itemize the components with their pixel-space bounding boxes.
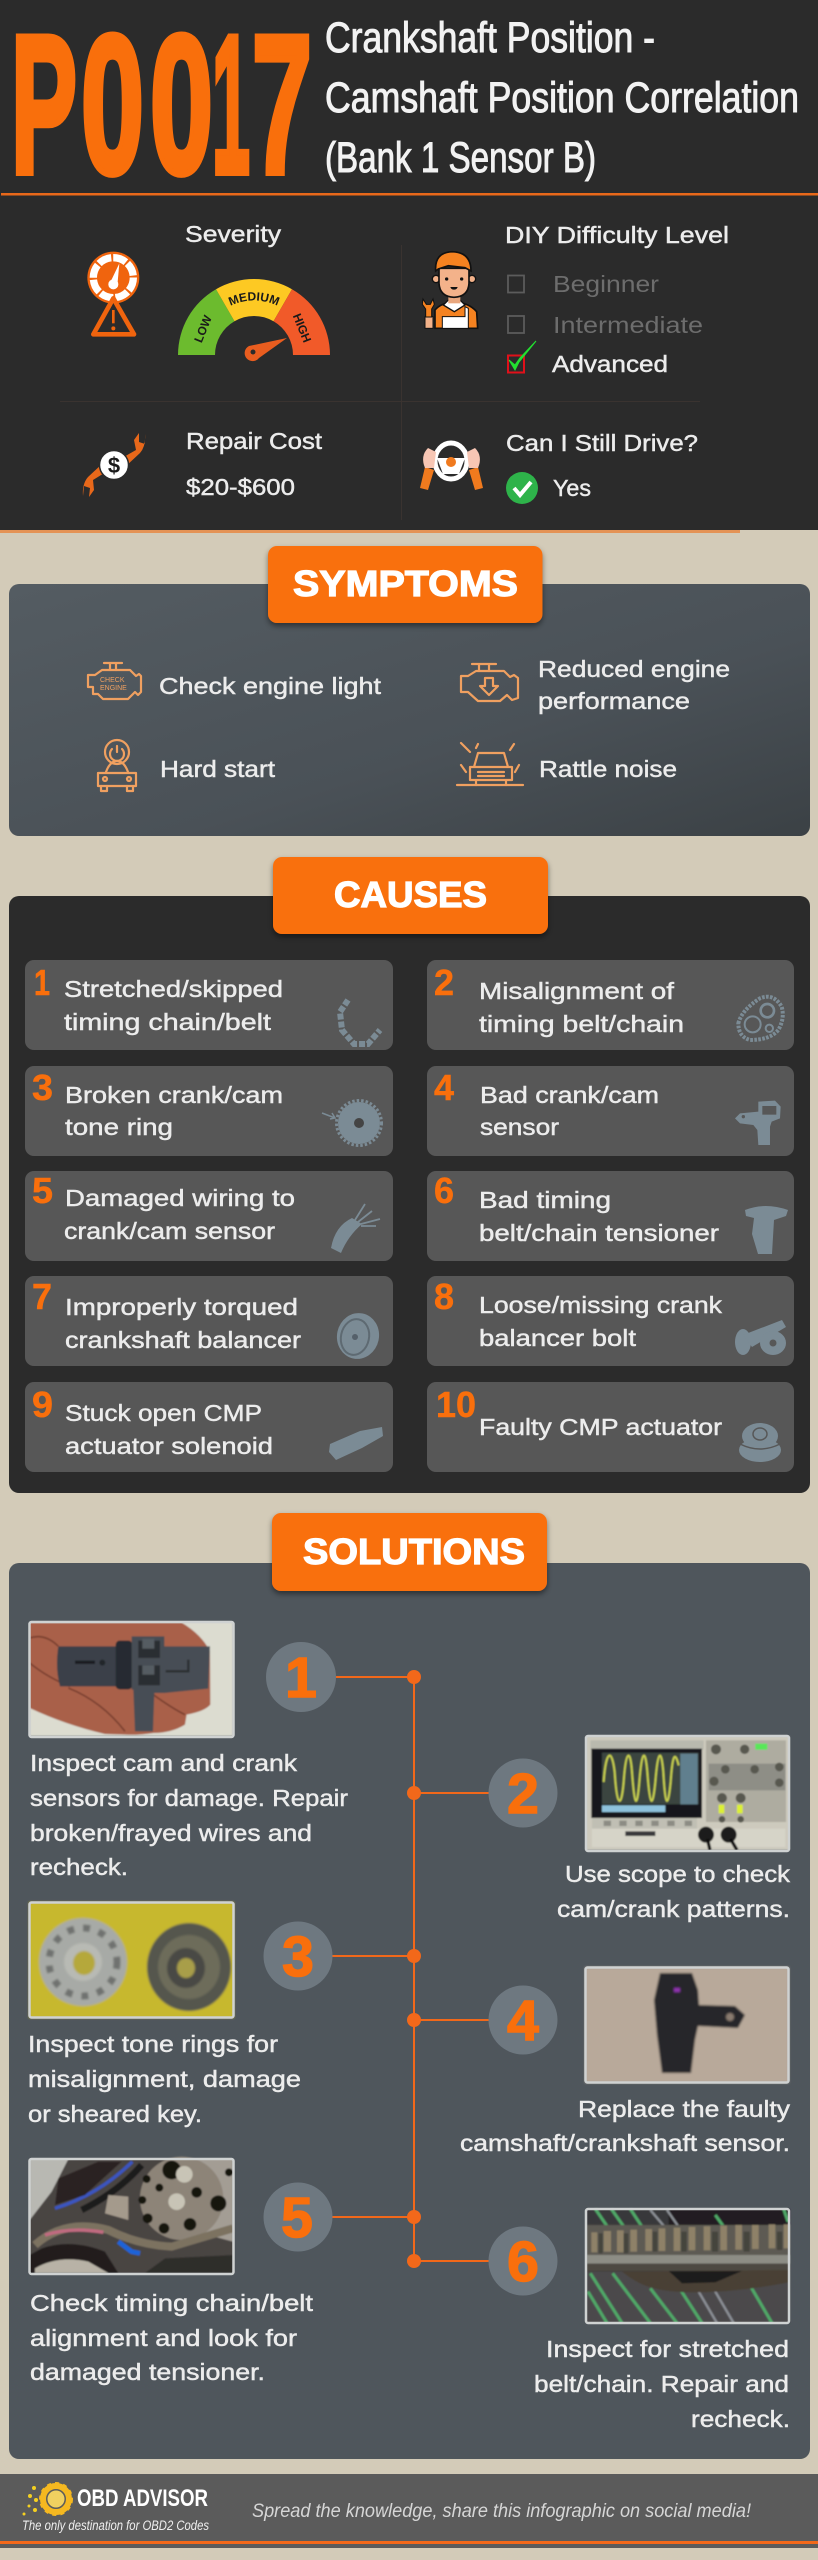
text: solution 1 bbox=[30, 1750, 348, 1880]
icon: check engine bbox=[88, 663, 141, 699]
step number 2 bbox=[488, 1758, 558, 1828]
control: difficulty options: Beginner bbox=[553, 271, 659, 297]
icon: reduced engine performance bbox=[461, 664, 518, 701]
card: cause 9: 9 bbox=[32, 1384, 53, 1425]
heading: symptoms bbox=[268, 546, 542, 623]
step number 2: 2 bbox=[507, 1762, 539, 1826]
text: repair cost: $20-$600 bbox=[186, 474, 295, 500]
card: cause 1: Stretched/skipped bbox=[64, 976, 283, 1002]
card: cause 7 bbox=[25, 1276, 393, 1366]
text: solution 3 bbox=[28, 2031, 301, 2127]
card: cause 6: Bad timing bbox=[479, 1187, 611, 1213]
card: cause 4: sensor bbox=[480, 1114, 559, 1140]
title: code description: (Bank 1 Sensor B) bbox=[325, 134, 596, 182]
card: cause 2 bbox=[427, 960, 794, 1050]
panel: header bbox=[0, 0, 818, 533]
card: cause 8: 8 bbox=[434, 1276, 454, 1317]
step number 3: 3 bbox=[282, 1925, 314, 1989]
step number 3 bbox=[264, 1922, 332, 1990]
card: cause 4 bbox=[427, 1066, 794, 1156]
text: solution 6: belt/chain. Repair and bbox=[534, 2371, 789, 2397]
icon: repair cost wrench and dollar bbox=[83, 433, 145, 497]
card: cause 5: crank/cam sensor bbox=[64, 1218, 275, 1244]
heading: causes: CAUSES bbox=[334, 874, 487, 915]
text: solution 1: Inspect cam and crank bbox=[30, 1750, 298, 1776]
step number 6 bbox=[488, 2226, 558, 2296]
heading: solutions: SOLUTIONS bbox=[303, 1531, 525, 1572]
text: solution 2 bbox=[557, 1861, 791, 1922]
text: hard start: Hard start bbox=[160, 756, 276, 782]
card: cause 9: Stuck open CMP bbox=[65, 1400, 262, 1426]
text: OBD Advisor logo: OBD ADVISOR bbox=[77, 2485, 208, 2512]
heading: solutions bbox=[272, 1513, 547, 1591]
text: solution 6 bbox=[534, 2336, 790, 2432]
text: solution 3: Inspect tone rings for bbox=[28, 2031, 278, 2057]
title: code description: Crankshaft Position - bbox=[325, 14, 655, 62]
card: cause 4: Bad crank/cam bbox=[480, 1082, 659, 1108]
step number 4 bbox=[488, 1986, 558, 2054]
card: cause 7: Improperly torqued bbox=[65, 1294, 298, 1320]
photo: oscilloscope bbox=[586, 1736, 789, 1851]
card: cause 9 bbox=[25, 1382, 393, 1472]
text: solution 4: camshaft/crankshaft sensor. bbox=[460, 2130, 790, 2156]
chart: severity gauge: MEDIUM bbox=[228, 292, 280, 306]
text: solution 1: sensors for damage. Repair bbox=[30, 1785, 348, 1811]
step number 4: 4 bbox=[507, 1989, 539, 2053]
text: solution 6: Inspect for stretched bbox=[546, 2336, 789, 2362]
card: cause 10: 10 bbox=[436, 1384, 476, 1425]
icon: repair cost wrench and dollar: $ bbox=[108, 453, 120, 478]
card: cause 8: Loose/missing crank bbox=[479, 1292, 723, 1318]
photo: sensor in hand bbox=[30, 1622, 234, 1737]
text: repair cost: Repair Cost bbox=[186, 428, 323, 454]
icon: severity speedometer and warning bbox=[87, 252, 139, 334]
text: reduced engine performance: Reduced engine bbox=[538, 656, 730, 682]
card: cause 3 bbox=[25, 1066, 393, 1156]
card: cause 10: Faulty CMP actuator bbox=[479, 1414, 722, 1440]
card: cause 1: 1 bbox=[34, 962, 50, 1003]
title: code P0017: 0 bbox=[150, 0, 213, 214]
heading: causes bbox=[273, 857, 548, 934]
text: solution 6: recheck. bbox=[691, 2406, 790, 2432]
text: check engine light: Check engine light bbox=[159, 673, 382, 699]
chart: severity gauge: HIGH bbox=[290, 311, 314, 345]
text: solution 4: Replace the faulty bbox=[578, 2096, 791, 2122]
photo: timing chain bbox=[30, 2157, 234, 2274]
photo: tone rings bbox=[29, 1902, 234, 2018]
chart: severity gauge: LOW bbox=[191, 313, 215, 345]
step number 1: 1 bbox=[285, 1646, 317, 1710]
card: cause 7: crankshaft balancer bbox=[65, 1327, 301, 1353]
text: OBD Advisor logo bbox=[22, 2485, 209, 2533]
text: solution 2: Use scope to check bbox=[565, 1861, 791, 1887]
text: can I still drive bbox=[506, 430, 698, 504]
panel: footer bbox=[0, 2474, 818, 2548]
text: solution 2: cam/crank patterns. bbox=[557, 1896, 790, 1922]
heading: symptoms: SYMPTOMS bbox=[293, 563, 518, 604]
card: cause 2: timing belt/chain bbox=[479, 1011, 684, 1037]
timeline connector bbox=[332, 1670, 489, 2268]
text: solution 3: or sheared key. bbox=[28, 2101, 202, 2127]
text: OBD Advisor logo: The only destination for OBD2 Codes bbox=[22, 2518, 209, 2533]
text: share message: Spread the knowledge, share this infographic on social media! bbox=[252, 2501, 752, 2522]
title: code P0017 bbox=[11, 0, 312, 214]
card: cause 8: balancer bolt bbox=[479, 1325, 637, 1351]
card: cause 3: Broken crank/cam bbox=[65, 1082, 283, 1108]
text: solution 5: Check timing chain/belt bbox=[30, 2290, 314, 2316]
card: cause 2: Misalignment of bbox=[479, 978, 675, 1004]
card: cause 3: tone ring bbox=[65, 1114, 173, 1140]
text: solution 5: damaged tensioner. bbox=[30, 2359, 265, 2385]
icon: rattle noise bbox=[457, 743, 523, 785]
title: code description bbox=[325, 14, 799, 182]
chart: severity gauge bbox=[178, 279, 330, 362]
text: severity heading: Severity bbox=[185, 221, 282, 247]
control: difficulty options: Intermediate bbox=[553, 312, 703, 338]
card: cause 10 bbox=[427, 1382, 794, 1472]
card: cause 6: belt/chain tensioner bbox=[479, 1220, 719, 1246]
icon: check engine: ENGINE bbox=[100, 685, 127, 692]
text: repair cost bbox=[186, 428, 323, 500]
control: difficulty options: Advanced bbox=[552, 351, 668, 377]
step number 6: 6 bbox=[507, 2230, 539, 2294]
card: cause 1: timing chain/belt bbox=[64, 1009, 272, 1035]
card: cause 7: 7 bbox=[32, 1276, 52, 1317]
icon: mechanic bbox=[422, 252, 478, 328]
photo: replacement sensor bbox=[585, 1967, 789, 2083]
text: solution 4 bbox=[460, 2096, 791, 2156]
title: code P0017: P bbox=[11, 0, 77, 214]
text: difficulty heading: DIY Difficulty Level bbox=[505, 222, 729, 248]
card: cause 6: 6 bbox=[434, 1170, 454, 1211]
text: reduced engine performance bbox=[538, 656, 730, 714]
card: cause 8 bbox=[427, 1276, 794, 1366]
card: cause 4: 4 bbox=[434, 1067, 454, 1108]
title: code P0017: 0 bbox=[81, 0, 144, 214]
card: cause 5: 5 bbox=[32, 1170, 53, 1211]
text: can I still drive: Can I Still Drive? bbox=[506, 430, 698, 456]
text: solution 1: recheck. bbox=[30, 1854, 128, 1880]
text: solution 3: misalignment, damage bbox=[28, 2066, 301, 2092]
step number 1 bbox=[266, 1642, 336, 1712]
icon: OBD Advisor gear logo bbox=[22, 2484, 72, 2516]
card: cause 6 bbox=[427, 1170, 794, 1261]
panel: solutions bbox=[9, 1513, 810, 2459]
card: cause 1 bbox=[25, 960, 393, 1050]
text: solution 1: broken/frayed wires and bbox=[30, 1820, 312, 1846]
card: cause 2: 2 bbox=[434, 962, 454, 1003]
card: cause 5: Damaged wiring to bbox=[65, 1185, 295, 1211]
control: difficulty options bbox=[508, 271, 703, 377]
text: reduced engine performance: performance bbox=[538, 688, 690, 714]
title: code P0017: 7 bbox=[252, 0, 312, 214]
icon: check engine: CHECK bbox=[100, 677, 125, 684]
icon: hard start bbox=[98, 740, 136, 791]
card: cause 9: actuator solenoid bbox=[65, 1433, 273, 1459]
icon: steering wheel bbox=[420, 443, 483, 490]
panel: causes bbox=[9, 857, 810, 1493]
card: cause 3: 3 bbox=[32, 1067, 53, 1108]
text: solution 5: alignment and look for bbox=[30, 2325, 297, 2351]
panel: symptoms bbox=[9, 546, 810, 836]
step number 5: 5 bbox=[281, 2186, 313, 2250]
text: solution 5 bbox=[30, 2290, 314, 2385]
step number 5 bbox=[264, 2182, 332, 2252]
title: code P0017: 1 bbox=[212, 0, 250, 214]
photo: worn belt bbox=[586, 2209, 790, 2323]
text: can I still drive: Yes bbox=[553, 475, 591, 501]
text: rattle noise: Rattle noise bbox=[539, 756, 677, 782]
card: cause 5 bbox=[25, 1170, 393, 1261]
